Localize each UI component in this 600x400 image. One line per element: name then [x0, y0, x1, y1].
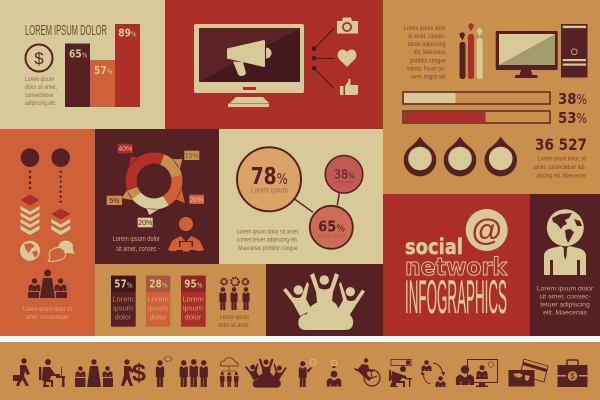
stat card: 28%: ipsum — [148, 304, 168, 312]
stat card: 28%: 28 — [149, 278, 162, 290]
label: 40% — [118, 144, 133, 153]
progress bar: 53%: 53 — [558, 109, 576, 127]
text block: dollar description — [25, 76, 57, 107]
circle stat: 78% — [237, 147, 301, 211]
progress bar: 38% — [403, 90, 587, 108]
icon: globe-head businessman — [544, 209, 586, 275]
icon: briefcase — [558, 360, 588, 387]
stat card: 28% — [146, 276, 170, 327]
icon: stressed worker — [389, 360, 412, 387]
stat card: 57%: Lorem — [112, 294, 134, 304]
icon: small globe — [20, 241, 40, 261]
text block: dollar description: adipiscing elit. — [25, 100, 56, 107]
stat card: 95% — [181, 276, 206, 327]
panel: icon strip — [0, 342, 600, 400]
stat card: 95%: Lorem — [182, 294, 204, 304]
icon: man pushing dollar: $ — [132, 359, 146, 387]
icon: head with bulb — [327, 360, 341, 386]
icon: camera — [337, 18, 358, 34]
circle stat: 78%: 78 — [251, 164, 277, 190]
icon: at sign: @ — [472, 212, 502, 247]
label: 15%: 15% — [185, 153, 199, 160]
text block: devices description — [404, 25, 447, 80]
text block: team caption — [218, 314, 250, 329]
icon: desktop computer — [496, 24, 588, 78]
text block: globe caption — [537, 286, 594, 316]
bar chart: 57 — [94, 64, 107, 77]
circle stat: 38%: % — [348, 171, 355, 180]
icon: speech bubbles — [48, 241, 75, 261]
icon: dotted stacks — [20, 148, 70, 235]
icon: running clock — [354, 358, 380, 386]
circle stat: 65%: 65 — [318, 218, 336, 236]
icon: walking man — [13, 358, 30, 386]
panel: background cream — [0, 0, 165, 129]
icon: heart — [338, 49, 356, 67]
icon: cloud network — [220, 358, 239, 387]
text block: team caption: dolor sit amet. — [218, 322, 250, 329]
donut chart — [122, 153, 185, 215]
bar chart: % — [131, 31, 137, 39]
text block: globe caption: tetuer adipiscing — [540, 302, 590, 308]
icon: meeting people — [28, 270, 67, 298]
icon: three drops — [404, 136, 517, 176]
text block: circles caption: Maecenas porttitor congue — [238, 245, 298, 252]
bar chart: % — [82, 51, 88, 59]
text block: devices description: Lorem ipsum dolor — [404, 25, 447, 32]
panel: maroon cloud — [266, 264, 383, 336]
progress bar: 38%: 38 — [558, 90, 576, 108]
icon: dollar coin: $ — [34, 49, 44, 68]
text block: dollar description: dolor sit amet, — [25, 84, 57, 91]
text block: people caption: Lorem ipsum dolor sit — [23, 306, 72, 313]
label: 40%: 40% — [118, 146, 132, 153]
text block: dollar description: consectetuer — [25, 92, 55, 99]
circle stat: 78%: % — [277, 170, 288, 188]
text block: stat description: piscing elit. Maecenas — [537, 172, 586, 180]
panel: red title — [383, 194, 530, 336]
label: 20% bottom: 20% — [138, 220, 152, 227]
icon: meeting — [75, 359, 113, 387]
icon: cloud people — [245, 359, 287, 388]
panel: cream circles — [219, 129, 383, 264]
panel: orange column — [0, 129, 95, 336]
text block: devices description: massa. Fusce po- — [406, 66, 446, 72]
stat card: 28%: Lorem — [147, 294, 169, 304]
icon: at sign — [466, 209, 508, 251]
label: 20% right: 20% — [190, 197, 204, 204]
icon: man with bubble — [156, 356, 172, 387]
text block: people caption: amet, consectetuer — [26, 314, 70, 321]
text block: donut caption — [112, 234, 160, 253]
stat card: 95%: ipsum — [183, 304, 203, 312]
icon: dollar coin — [26, 44, 52, 72]
circle stat: 38% — [325, 156, 363, 193]
icon: man pushing dollar — [121, 359, 146, 387]
panel: maroon globe — [530, 194, 600, 336]
icon: people on cloud — [283, 273, 365, 330]
circle stat: 78%: Lorem ipsum — [251, 186, 288, 194]
progress bar: 53% — [403, 109, 587, 127]
text block: team caption: Lorem ipsum — [220, 314, 249, 321]
text block: stat description: amet, consectetuer adi- — [534, 164, 586, 171]
stat card: 95%: % — [197, 282, 203, 290]
icon: briefcase: $ — [570, 372, 575, 381]
text block: people caption — [23, 306, 72, 321]
text block: donut caption: sit amet, consec - — [116, 244, 160, 253]
icon: man with bulb — [299, 359, 316, 387]
icon: monitor with megaphone — [194, 24, 304, 107]
circle stat: 65%: % — [336, 224, 345, 235]
stat card: 95%: dolor — [185, 312, 202, 322]
bar chart: 65 — [69, 47, 82, 60]
bar chart — [65, 24, 140, 107]
icon: presentation screen — [456, 360, 498, 387]
icon: gears and team — [219, 278, 250, 310]
panel: ochre devices — [383, 0, 600, 194]
text block: dollar description: Lorem ipsum — [25, 76, 54, 83]
bar chart: 89 — [118, 27, 131, 40]
stat card: 57%: 57 — [114, 278, 127, 290]
text block: circles caption: Lorem ipsum dolor sit amet, — [237, 228, 299, 236]
text block: circles caption: consectetuer adipiscing elit. — [237, 237, 298, 244]
progress bar: 38%: % — [576, 93, 587, 108]
text block: devices description: porttitor congue — [410, 58, 446, 64]
text block: devices description: sit amet, consec- — [408, 33, 446, 40]
connectors between circles — [295, 193, 339, 212]
icon: tube chart — [460, 23, 483, 79]
text block: circles caption — [237, 228, 299, 252]
bar chart: % — [107, 68, 113, 76]
title: social: social — [405, 235, 463, 259]
icon: three men — [180, 359, 208, 387]
stat card: 57%: % — [127, 282, 133, 290]
text block: devices description: suere, magna sed — [410, 74, 446, 80]
progress bar: 53%: % — [576, 112, 587, 127]
text block: globe caption: Lorem ipsum dolor — [537, 286, 594, 292]
stat card: 57% — [111, 276, 136, 327]
stat card: 57%: dolor — [115, 312, 132, 322]
icon: businessman orange — [168, 217, 204, 252]
stat card: 57%: ipsum — [113, 304, 133, 312]
panel: maroon donut — [95, 129, 219, 264]
stat card: 95%: 95 — [184, 278, 197, 290]
icon row — [13, 356, 588, 388]
connector lines — [312, 28, 334, 88]
heading: lorem ipsum dolor: LOREM IPSUM DOLOR — [25, 22, 107, 39]
circle stat: 38%: 38 — [334, 167, 348, 181]
label: 5%: 5% — [109, 198, 119, 205]
icon: thumbs up — [340, 79, 358, 95]
label: 5% — [107, 196, 122, 205]
circle stat: 38%: Lorem ipsum — [334, 179, 355, 184]
text block: devices description: tetuer adipiscing — [408, 41, 446, 48]
icon: desk worker — [39, 359, 65, 387]
stat: 36 527: 36 527 — [535, 135, 587, 154]
text block: globe caption: elit. Maecenas — [543, 310, 588, 316]
icon: cycle of people — [421, 360, 446, 387]
icon: map and card — [508, 359, 548, 386]
text block: devices description: elit. Maecenas — [414, 49, 446, 56]
circle stat: 65% — [310, 206, 353, 249]
text block: globe caption: sit amet, consec- — [539, 294, 591, 300]
label: 20% bottom — [138, 218, 153, 227]
title: network: network — [405, 253, 508, 281]
text block: donut caption: Lorem ipsum dolor — [112, 234, 160, 243]
stat card: 28%: % — [162, 282, 168, 290]
panel: ochre stats — [95, 264, 266, 336]
panel: red monitor — [165, 0, 383, 129]
text block: stat description — [534, 156, 586, 180]
text block: stat description: Lorem ipsum dolor, sit — [538, 156, 586, 162]
stat card: 28%: dolor — [150, 312, 167, 322]
circle stat: 65%: Lorem ipsum — [318, 234, 345, 240]
